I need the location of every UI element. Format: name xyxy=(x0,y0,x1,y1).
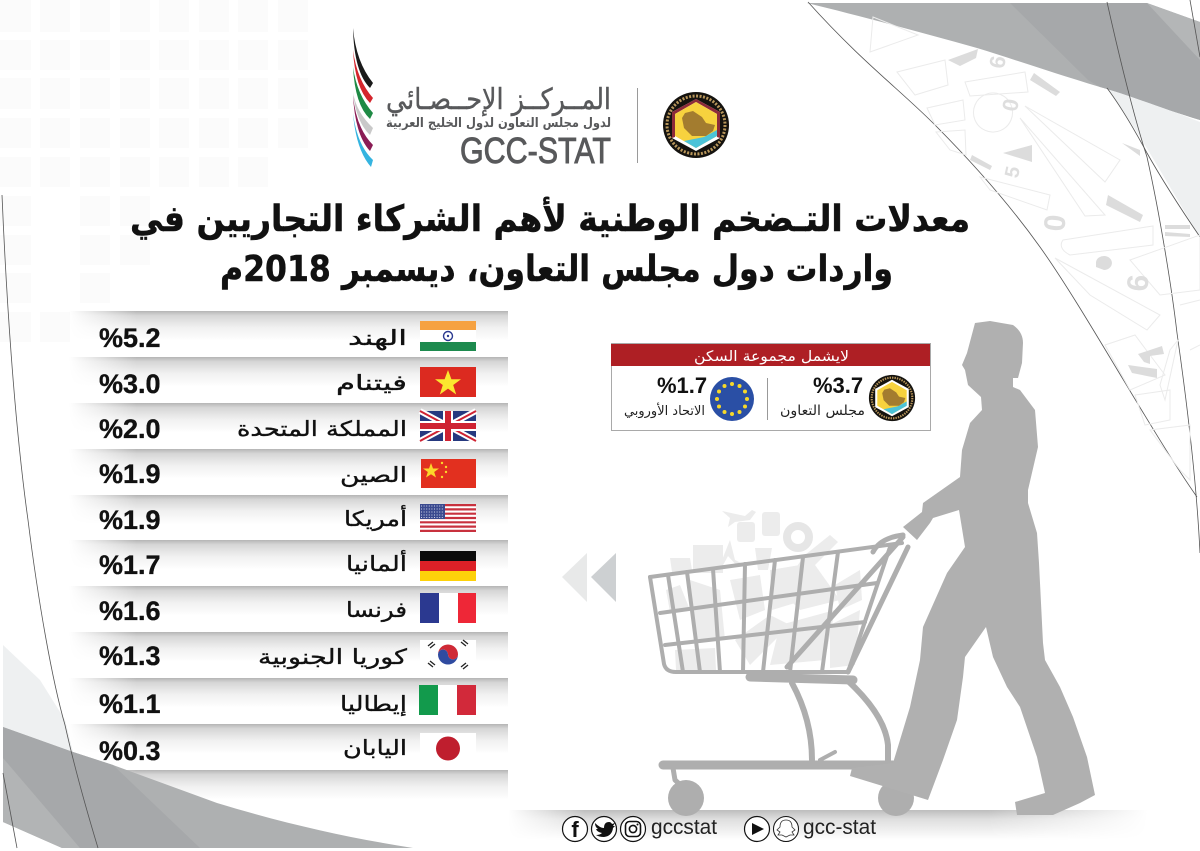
row: Vietnam: فيتنام xyxy=(336,371,407,395)
arrow: double chevron xyxy=(562,553,616,602)
flag: South Korea xyxy=(420,640,476,669)
illustration: person silhouette xyxy=(850,321,1095,815)
flag: France xyxy=(420,593,476,623)
icon: GCC emblem small xyxy=(869,375,915,421)
row: United States: %1.9 xyxy=(99,505,161,535)
row: France: فرنسا xyxy=(346,598,407,622)
row: Italy xyxy=(99,685,476,719)
item: EU: %1.7 xyxy=(657,373,707,398)
title line 1: معدلات التـضخم الوطنية لأهم الشركاء التجاريين في xyxy=(130,196,970,240)
decoration: pattern solid marks xyxy=(948,49,1190,378)
icon: GCC emblem xyxy=(663,92,729,158)
decoration: bottom left corner shapes xyxy=(2,195,413,848)
decoration: pattern digits xyxy=(984,54,1156,293)
cart basket xyxy=(650,543,902,672)
decoration: pattern digits: 0 xyxy=(997,97,1024,113)
item: EU xyxy=(624,373,754,421)
decoration: pattern digits: 5 xyxy=(1001,164,1025,180)
background: faint square grid xyxy=(0,0,308,342)
row: France: %1.6 xyxy=(99,596,161,626)
row: United Kingdom: المملكة المتحدة xyxy=(237,417,407,441)
row: India: الهند xyxy=(348,326,407,350)
title line 2: واردات دول مجلس التعاون، ديسمبر 2018م xyxy=(220,249,893,290)
flag: Germany xyxy=(420,551,476,581)
flag: Italy xyxy=(419,685,476,715)
icon: facebook xyxy=(562,816,588,842)
panel: population note xyxy=(611,344,930,430)
decoration: pale pattern of outlined shapes and digits xyxy=(870,17,1200,480)
handle: gcc-stat: gcc-stat xyxy=(803,816,876,839)
row: Vietnam: %3.0 xyxy=(99,369,161,399)
icon: twitter xyxy=(592,816,616,842)
item: GCC xyxy=(780,373,915,421)
row: India xyxy=(99,321,476,353)
flag: United States xyxy=(420,504,476,532)
decoration: top right corner shapes xyxy=(807,0,1200,553)
logo text: Arabic subtitle: لدول مجلس التعاون لدول الخليج العربية xyxy=(386,116,611,131)
row backgrounds xyxy=(60,311,508,816)
row: South Korea xyxy=(99,640,476,671)
panel header xyxy=(611,344,930,366)
row: Germany xyxy=(99,550,476,581)
row: Japan: %0.3 xyxy=(99,736,161,766)
row: United Kingdom: %2.0 xyxy=(99,414,161,444)
icon: coloured ribbon xyxy=(353,28,373,167)
item: GCC: %3.7 xyxy=(813,373,863,398)
decoration: pattern digits: 6 xyxy=(984,54,1011,70)
row: China xyxy=(99,459,476,489)
flag: United Kingdom xyxy=(420,411,476,441)
flag: Japan xyxy=(420,733,476,763)
row: India: %5.2 xyxy=(99,323,161,353)
row: Vietnam xyxy=(99,367,476,399)
row: Italy: إيطاليا xyxy=(340,692,407,717)
icon: facebook: f xyxy=(571,817,579,842)
row: United States: أمريكا xyxy=(344,505,407,531)
cart frame xyxy=(663,535,908,790)
handle: gccstat: gccstat xyxy=(651,816,717,839)
row: France xyxy=(99,593,476,626)
logo text: GCC-STAT: GCC-STAT xyxy=(460,130,611,171)
flag: Vietnam xyxy=(420,367,476,397)
row: China: الصين xyxy=(340,463,407,487)
panel: countries table xyxy=(99,321,476,766)
cart wheels xyxy=(668,780,914,816)
row: Japan: اليابان xyxy=(343,736,407,760)
item: GCC: مجلس التعاون xyxy=(780,403,865,419)
icon: instagram xyxy=(620,816,646,842)
row: Germany: %1.7 xyxy=(99,550,161,580)
logo: GCC-STAT header xyxy=(353,28,729,171)
row: South Korea: %1.3 xyxy=(99,641,161,671)
icon: snapchat xyxy=(774,816,798,842)
footer: social media handles xyxy=(562,816,876,842)
row: United States xyxy=(99,504,476,535)
panel header: لايشمل مجموعة السكن xyxy=(694,349,849,365)
row: Germany: ألمانيا xyxy=(346,550,407,576)
row: Italy: %1.1 xyxy=(99,689,161,719)
illustration: goods in cart xyxy=(666,510,862,670)
icon: EU flag xyxy=(710,377,754,421)
icon: youtube xyxy=(744,816,770,842)
logo text: Arabic name: المــركــز الإحــصـائي xyxy=(386,82,611,117)
footer shade xyxy=(518,810,1127,834)
decoration: pattern digits: 6 xyxy=(1121,273,1156,293)
row: United Kingdom xyxy=(99,411,476,444)
row: South Korea: كوريا الجنوبية xyxy=(258,645,407,669)
item: EU: الاتحاد الأوروبي xyxy=(624,402,705,419)
row: China: %1.9 xyxy=(99,459,161,489)
flag: India xyxy=(420,321,476,351)
title xyxy=(130,196,970,290)
row: Japan xyxy=(99,733,476,766)
flag: China xyxy=(421,459,476,488)
decoration: pattern digits: 0 xyxy=(1038,213,1073,233)
illustration: shopping cart xyxy=(650,535,914,816)
